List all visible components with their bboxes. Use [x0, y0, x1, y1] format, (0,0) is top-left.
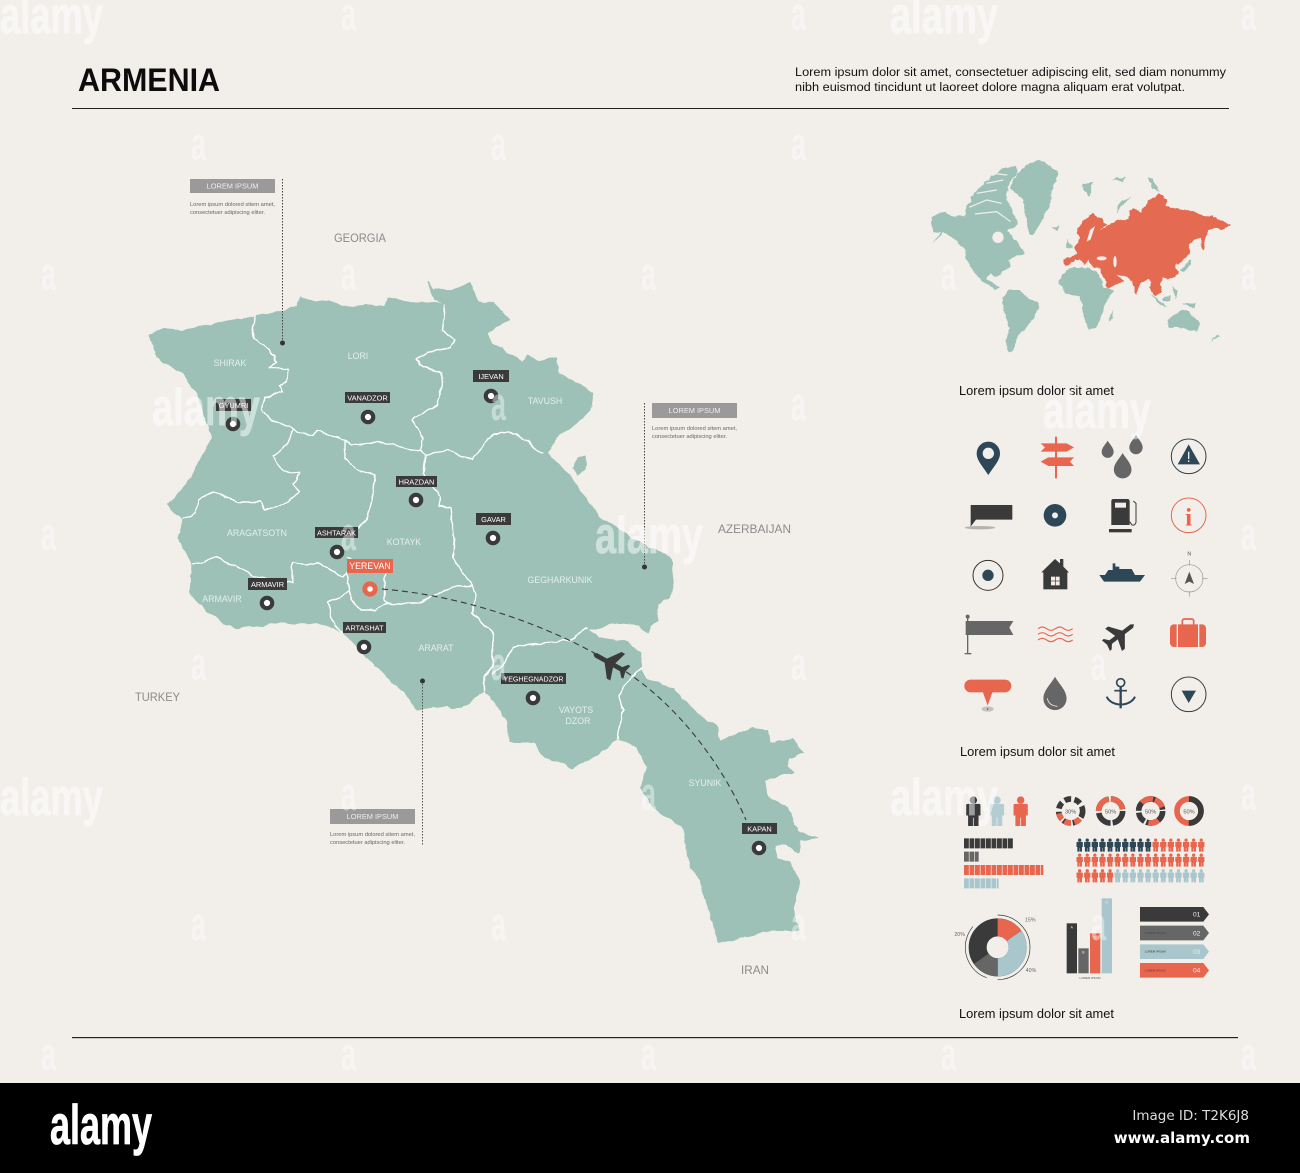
region labels: SYUNIK [689, 778, 722, 788]
donut: 50% segmented [1134, 794, 1168, 828]
watermarks: a [191, 897, 206, 950]
heading: charts: Lorem ipsum dolor sit amet [959, 1007, 1115, 1021]
callout: Ararat: consectetuer adipiscing eliter. [330, 840, 405, 846]
icon: house [1041, 559, 1069, 589]
watermarks: alamy [890, 769, 998, 827]
icon: warning [1171, 439, 1206, 474]
donut: 50% segmented: 50% [1145, 809, 1156, 815]
watermarks: a [191, 637, 206, 690]
region labels: GEGHARKUNIK [527, 575, 593, 585]
city: Artashat: ARTASHAT [345, 624, 384, 632]
watermarks: a [941, 247, 956, 300]
watermarks: a [491, 377, 506, 430]
city: Ijevan [473, 370, 509, 401]
watermarks: a [1241, 767, 1256, 820]
donut: 50% half: 50% [1183, 809, 1195, 815]
watermarks: a [791, 897, 806, 950]
footer bar: www.alamy.com [1114, 1129, 1250, 1147]
neighbouring country labels: AZERBAIJAN [718, 523, 791, 536]
icon: compass [1171, 552, 1208, 597]
icon: plane [1098, 613, 1142, 657]
city: Yerevan capital [347, 559, 393, 594]
watermarks: a [341, 507, 356, 560]
pie chart: 20% [954, 932, 965, 938]
icon: anchor [1107, 679, 1135, 708]
icon: water drops [1102, 435, 1143, 478]
teal continents [930, 160, 1220, 353]
city: Gavar [476, 513, 511, 543]
callout: Gegharkunik: LOREM IPSUM [669, 406, 720, 415]
donut: 50%: 50% [1105, 809, 1116, 815]
donut: 50% half [1177, 799, 1201, 823]
watermarks: a [491, 637, 506, 690]
pie chart: 40% [1026, 968, 1037, 974]
callout: Ararat: Lorem ipsum dolored sitem amet, [330, 832, 415, 838]
title: ARMENIA [78, 62, 220, 98]
arrow list: 02 [1193, 930, 1201, 937]
watermarks: a [791, 637, 806, 690]
segmented bars [964, 843, 1043, 883]
region labels [202, 351, 722, 788]
region labels: KOTAYK [387, 537, 421, 547]
footer bar [0, 1083, 1300, 1173]
watermarks: alamy [1043, 382, 1151, 440]
bar chart: A [1070, 926, 1073, 930]
pie chart [954, 906, 1039, 989]
intro text [795, 65, 1227, 94]
city: Vanadzor [345, 392, 390, 422]
city: Yerevan capital: YEREVAN [349, 561, 391, 571]
donut: 50% [1099, 799, 1123, 823]
watermarks: a [341, 1027, 356, 1080]
watermarks: a [41, 507, 56, 560]
watermarks: a [641, 767, 656, 820]
icon: flag [965, 615, 1013, 654]
region labels: ARARAT [418, 643, 454, 653]
watermarks: alamy [595, 507, 703, 565]
watermarks: a [641, 247, 656, 300]
infographic set [954, 794, 1209, 989]
heading: infographics: Lorem ipsum dolor sit amet [960, 745, 1116, 759]
bar chart: C [1094, 936, 1097, 940]
city: Ashtarak: ASHTARAK [317, 528, 356, 538]
icon: coral marker [964, 680, 1011, 712]
watermarks: a [191, 117, 206, 170]
icon: disc [1044, 504, 1066, 527]
callout: Gegharkunik [642, 403, 737, 570]
region labels: VAYOTS [559, 705, 593, 715]
arrow list: 04 [1193, 968, 1201, 975]
city: Armavir: ARMAVIR [251, 580, 284, 589]
region labels: ARAGATSOTN [227, 528, 287, 538]
city: Gyumri [216, 399, 251, 429]
donut: 30% [1054, 794, 1088, 828]
watermarks: a [791, 117, 806, 170]
watermarks: a [491, 897, 506, 950]
icon: waves [1038, 627, 1073, 642]
city: Hrazdan [396, 476, 437, 505]
bar chart: D [1105, 901, 1108, 905]
callout: Lori: consectetuer adipiscing eliter. [190, 210, 265, 216]
icon: ship [1099, 563, 1145, 582]
region labels: DZOR [566, 716, 590, 726]
intro text: nibh euismod tincidunt ut laoreet dolore magna aliquam erat volutpat. [795, 80, 1185, 94]
watermarks: alamy [152, 379, 260, 437]
city: Yeghegnadzor: YEGHEGNADZOR [504, 674, 564, 684]
watermarks: a [41, 247, 56, 300]
city: Vanadzor: VANADZOR [347, 394, 388, 402]
watermarks: a [941, 1027, 956, 1080]
watermarks: alamy [0, 769, 103, 827]
city: Armavir [248, 578, 287, 608]
neighbouring country labels: TURKEY [135, 691, 180, 704]
watermarks: a [341, 247, 356, 300]
bar chart [1067, 898, 1112, 980]
Eurasia highlighted [1064, 193, 1230, 297]
city: Ijevan: IJEVAN [478, 372, 504, 381]
callout: Gegharkunik: Lorem ipsum dolored sitem amet, [652, 426, 737, 432]
footer bar: Image ID: T2K6J8 [1132, 1108, 1249, 1124]
city: Gyumri: GYUMRI [219, 401, 248, 410]
city: Gavar: GAVAR [481, 515, 506, 524]
arrow list: 03 [1193, 949, 1201, 956]
icon set [964, 435, 1208, 712]
city: Hrazdan: HRAZDAN [399, 478, 434, 486]
region labels: SHIRAK [214, 358, 247, 368]
country shape and region borders [150, 282, 817, 943]
icon: compass: N [1187, 552, 1191, 558]
icon: drop [1043, 677, 1067, 710]
Hudson Bay and arctic channels [969, 173, 1011, 243]
map: Armenia [150, 282, 817, 943]
callout: Lori: Lorem ipsum dolored sitem amet, [190, 202, 275, 208]
icon: info [1171, 498, 1206, 533]
arrow list: 01 [1193, 912, 1201, 919]
arrow list: LOREM IPSUM [1145, 931, 1166, 935]
people grid [1076, 838, 1204, 882]
region labels: ARMAVIR [202, 594, 242, 604]
watermarks: a [41, 1027, 56, 1080]
arrow list [1140, 907, 1209, 978]
city: Artashat [343, 622, 386, 652]
watermarks: a [341, 767, 356, 820]
icon: suitcase [1170, 619, 1206, 647]
icon: target [973, 560, 1003, 590]
bar chart: B [1082, 951, 1085, 955]
callout: Ararat [330, 678, 425, 846]
region labels: LORI [348, 351, 368, 361]
region labels: TAVUSH [528, 396, 562, 406]
donut: 30%: 30% [1065, 809, 1076, 815]
people icons [966, 796, 1028, 826]
icon: down arrow [1171, 677, 1206, 712]
icon: speech bubble [965, 505, 1012, 529]
callout: Gegharkunik: consectetuer adipiscing eliter. [652, 434, 727, 440]
city: Kapan [742, 823, 777, 853]
city: Ashtarak [315, 527, 358, 557]
callout: Lori: LOREM IPSUM [207, 182, 258, 190]
watermarks: a [1241, 507, 1256, 560]
arrow list: LOREM IPSUM [1145, 950, 1166, 954]
heading: icons: Lorem ipsum dolor sit amet [959, 384, 1115, 398]
watermarks: a [1091, 897, 1106, 950]
watermarks: a [641, 1027, 656, 1080]
watermarks: a [791, 377, 806, 430]
icon: airplane [586, 640, 634, 686]
intro text: Lorem ipsum dolor sit amet, consectetuer adipiscing elit, sed diam nonummy [795, 65, 1227, 79]
world map [930, 160, 1230, 353]
footer bar: alamy [50, 1093, 152, 1156]
inland seas [1087, 226, 1117, 267]
watermarks: a [1091, 637, 1106, 690]
watermarks: a [1241, 1027, 1256, 1080]
callout: Ararat: LOREM IPSUM [347, 812, 398, 821]
neighbouring country labels: GEORGIA [334, 232, 386, 245]
arrow list: LOREM IPSUM [1145, 968, 1166, 972]
watermarks: a [491, 117, 506, 170]
watermarks: a [1241, 247, 1256, 300]
neighbouring country labels: IRAN [741, 964, 769, 977]
icon: info: i [1185, 504, 1192, 532]
neighbouring country labels [135, 232, 791, 977]
icon: signpost [1041, 437, 1074, 478]
callout: Lori [190, 179, 285, 346]
pie chart: 15% [1025, 917, 1036, 923]
city: Kapan: KAPAN [747, 824, 772, 834]
icon: map pin [977, 442, 1000, 475]
city: Yeghegnadzor [501, 673, 566, 703]
bar chart: LOREM IPSUM [1080, 976, 1101, 980]
icon: fuel pump [1109, 499, 1136, 532]
flight route [382, 589, 746, 820]
